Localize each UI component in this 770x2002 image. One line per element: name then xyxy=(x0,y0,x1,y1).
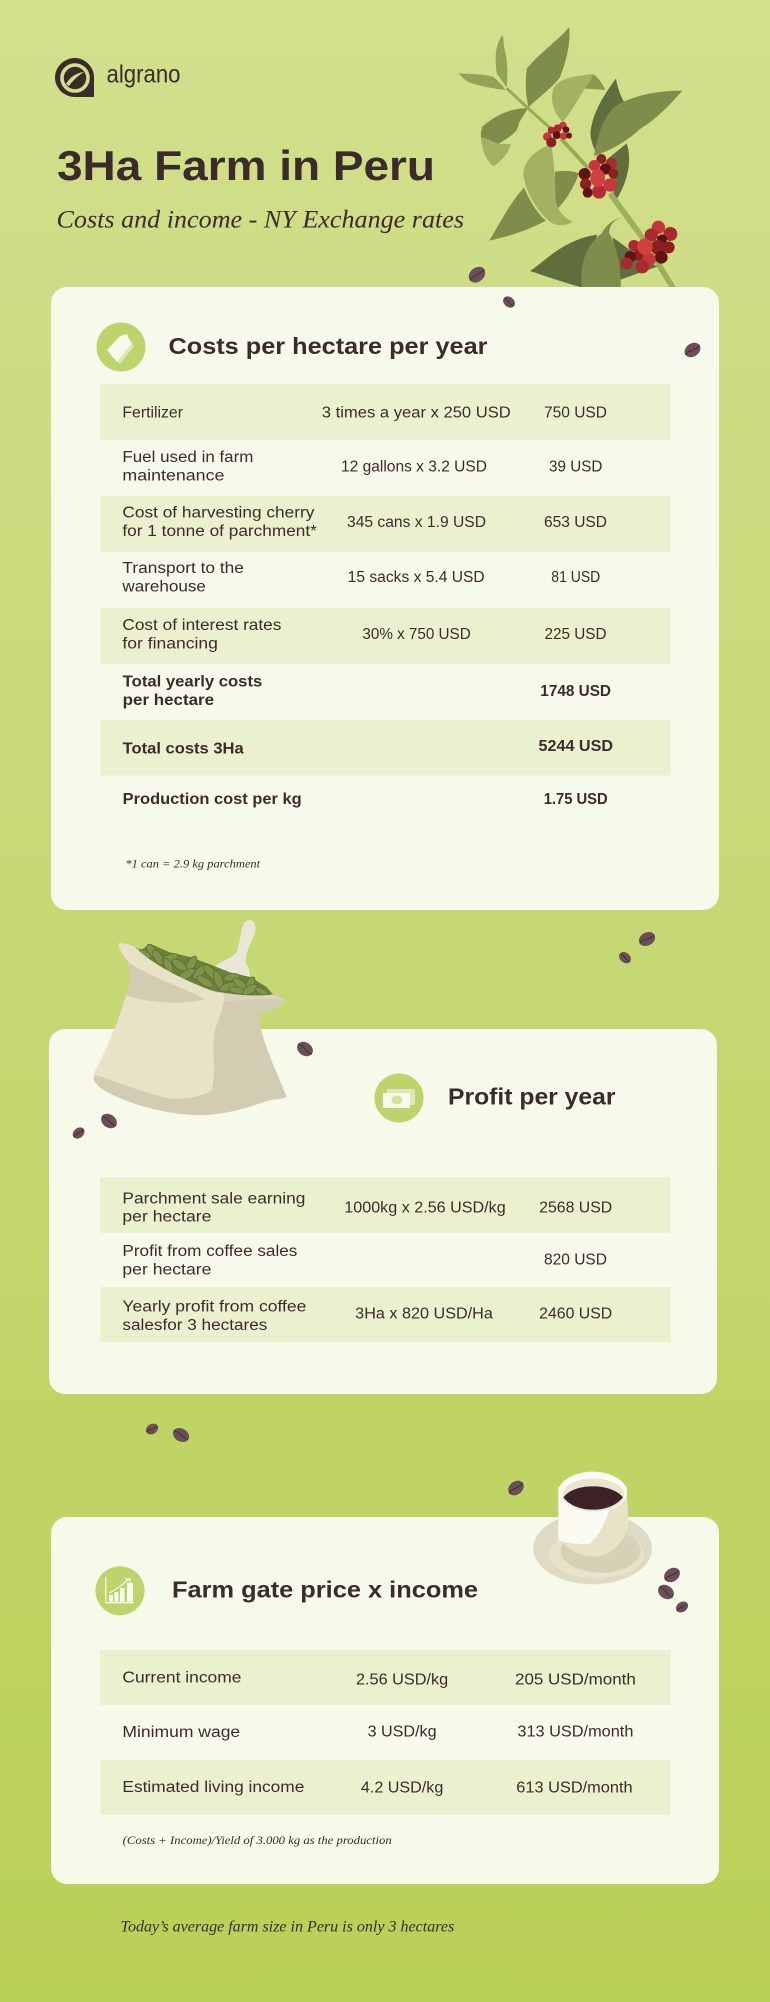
row: interest rates xyxy=(100,608,670,664)
row: yearly profit: 3Ha x 820 USD/Ha xyxy=(355,1305,493,1322)
row: total yearly costs: per hectare xyxy=(123,692,215,709)
panel: farm gate price x income xyxy=(51,1517,719,1884)
row: coffee sales: per hectare xyxy=(122,1261,211,1278)
row: transport xyxy=(121,560,600,595)
footnote: *1 can = 2.9 kg parchment xyxy=(125,856,261,870)
subtitle: Costs and income - NY Exchange rates xyxy=(56,206,464,234)
heading: Costs per hectare per year xyxy=(168,333,488,359)
row: total costs 3Ha: Total costs 3Ha xyxy=(123,740,244,757)
row: coffee sales: Profit from coffee sales xyxy=(122,1243,298,1260)
row: coffee sales: 820 USD xyxy=(544,1252,607,1269)
row: yearly profit xyxy=(100,1287,670,1342)
row: interest rates: for financing xyxy=(122,635,218,652)
icon: growth chart xyxy=(96,1566,144,1615)
heading: Farm gate price x income xyxy=(172,1576,478,1602)
row: fuel xyxy=(122,449,602,485)
row: total costs 3Ha xyxy=(100,720,670,776)
row: living income: 613 USD/month xyxy=(516,1779,633,1796)
row: minimum wage: 3 USD/kg xyxy=(368,1724,437,1741)
row: parchment sale: Parchment sale earning xyxy=(122,1190,305,1207)
row: interest rates: Cost of interest rates xyxy=(122,617,282,634)
row: minimum wage: 313 USD/month xyxy=(517,1724,633,1741)
title: 3Ha Farm in Peru xyxy=(57,142,435,189)
row: fertilizer: Fertilizer xyxy=(122,405,183,422)
row: coffee sales xyxy=(122,1243,607,1278)
row: interest rates: 225 USD xyxy=(544,626,606,643)
row: production cost: 1.75 USD xyxy=(544,791,608,808)
row: fertilizer: 3 times a year x 250 USD xyxy=(322,405,511,422)
heading: Profit per year xyxy=(448,1083,616,1109)
row: fertilizer: 750 USD xyxy=(544,405,607,422)
row: transport: 81 USD xyxy=(551,569,600,586)
row: fertilizer xyxy=(100,384,670,440)
coffee beans scattered xyxy=(70,264,703,1615)
row: transport: Transport to the xyxy=(122,560,244,577)
row: interest rates: 30% x 750 USD xyxy=(362,626,471,643)
row: total yearly costs: Total yearly costs xyxy=(123,674,262,691)
row: fuel: 12 gallons x 3.2 USD xyxy=(341,459,487,476)
row: current income: 2.56 USD/kg xyxy=(356,1672,448,1689)
row: production cost xyxy=(123,791,608,808)
row: yearly profit: salesfor 3 hectares xyxy=(122,1317,268,1334)
logo: algrano: algrano xyxy=(106,61,180,89)
illustration: coffee branch xyxy=(458,27,682,288)
row: minimum wage xyxy=(122,1724,633,1741)
icon: banknotes xyxy=(374,1074,424,1122)
icon: price tag xyxy=(96,322,146,372)
row: harvesting: 345 cans x 1.9 USD xyxy=(347,514,486,531)
row: parchment sale: 1000kg x 2.56 USD/kg xyxy=(344,1199,506,1216)
illustration: sack of green coffee xyxy=(93,920,287,1115)
row: total yearly costs: 1748 USD xyxy=(540,683,611,700)
row: harvesting xyxy=(100,496,670,552)
row: fuel: maintenance xyxy=(122,468,224,485)
row: production cost: Production cost per kg xyxy=(123,791,302,808)
row: fuel: 39 USD xyxy=(549,459,602,476)
row: harvesting: Cost of harvesting cherry xyxy=(122,505,315,522)
row: harvesting: 653 USD xyxy=(544,514,607,531)
row: parchment sale: per hectare xyxy=(122,1209,211,1226)
row: parchment sale xyxy=(100,1177,670,1233)
row: current income: Current income xyxy=(122,1670,241,1687)
row: living income: Estimated living income xyxy=(122,1779,304,1796)
row: transport: warehouse xyxy=(121,578,206,595)
row: yearly profit: Yearly profit from coffee xyxy=(122,1299,306,1316)
panel: costs per hectare per year xyxy=(51,287,719,910)
row: current income: 205 USD/month xyxy=(515,1672,636,1689)
row: living income xyxy=(100,1760,670,1815)
panel: profit per year xyxy=(49,1029,717,1394)
row: living income: 4.2 USD/kg xyxy=(361,1779,443,1796)
formula note: (Costs + Income)/Yield of 3.000 kg as the production xyxy=(123,1833,392,1847)
row: fuel: Fuel used in farm xyxy=(122,449,253,466)
row: current income xyxy=(100,1650,670,1705)
row: parchment sale: 2568 USD xyxy=(539,1199,612,1216)
closing note: Today’s average farm size in Peru is only 3 hectares xyxy=(120,1919,454,1936)
row: minimum wage: Minimum wage xyxy=(122,1724,240,1741)
row: yearly profit: 2460 USD xyxy=(539,1305,612,1322)
row: transport: 15 sacks x 5.4 USD xyxy=(348,569,485,586)
row: harvesting: for 1 tonne of parchment* xyxy=(122,523,317,540)
illustration: coffee cup xyxy=(533,1472,652,1584)
row: total costs 3Ha: 5244 USD xyxy=(538,738,613,755)
logo: algrano xyxy=(55,58,180,97)
row: total yearly costs xyxy=(123,674,611,709)
